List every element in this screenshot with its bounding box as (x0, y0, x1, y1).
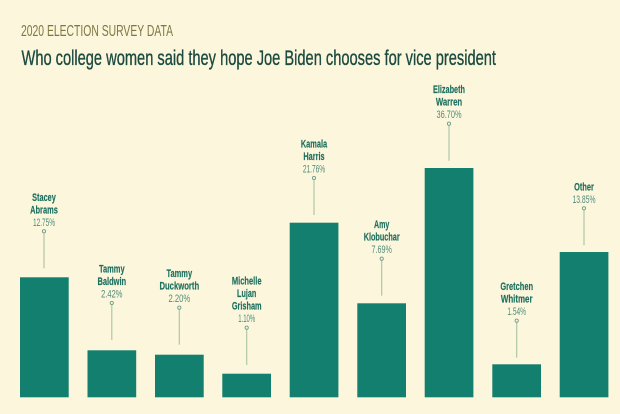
bar: Elizabeth Warren (425, 84, 473, 397)
bar: Tammy Duckworth: 2.20% (168, 293, 191, 305)
bar: Kamala Harris: Harris (303, 151, 325, 163)
bar: Amy Klobuchar: Amy (374, 219, 389, 231)
bar: Stacey Abrams: Abrams (30, 204, 58, 216)
bar: Tammy Baldwin: 2.42% (101, 288, 123, 300)
bar: Stacey Abrams (20, 192, 69, 397)
bar: Elizabeth Warren: Elizabeth (433, 84, 465, 96)
bar: Tammy Baldwin: Baldwin (97, 276, 126, 288)
bar: Kamala Harris (290, 139, 338, 397)
bar: Amy Klobuchar: 7.69% (372, 244, 392, 256)
kicker heading: 2020 ELECTION SURVEY DATA (21, 23, 173, 40)
bar: Gretchen Whitmer: Gretchen (500, 281, 533, 293)
bar: Kamala Harris: 21.76% (303, 164, 326, 176)
bar: Gretchen Whitmer: Whitmer (501, 294, 533, 306)
bar: Michelle Lujan Grisham: Grisham (232, 301, 262, 313)
bar: Michelle Lujan Grisham (222, 276, 271, 397)
bar: Tammy Baldwin (88, 264, 136, 397)
bar: Amy Klobuchar: Klobuchar (364, 232, 400, 244)
bar: Gretchen Whitmer: 1.54% (507, 306, 526, 318)
bar: Tammy Duckworth: Tammy (166, 268, 192, 280)
bar: Michelle Lujan Grisham: Lujan (237, 288, 256, 300)
bar: Gretchen Whitmer (492, 281, 541, 397)
bar chart (20, 84, 608, 397)
bar: Tammy Duckworth: Duckworth (159, 281, 199, 293)
bar: Amy Klobuchar (357, 219, 406, 397)
bar: Other: 13.85% (572, 194, 596, 206)
bar: Elizabeth Warren: Warren (436, 97, 462, 109)
bar: Elizabeth Warren: 36.70% (436, 109, 462, 121)
bar: Stacey Abrams: Stacey (32, 192, 56, 204)
bar: Tammy Duckworth (155, 268, 204, 397)
bar: Stacey Abrams: 12.75% (33, 217, 55, 229)
bar: Other: Other (574, 181, 594, 193)
bar: Other (560, 181, 608, 397)
bar: Michelle Lujan Grisham: Michelle (232, 276, 262, 288)
bar: Kamala Harris: Kamala (301, 139, 327, 151)
bar: Michelle Lujan Grisham: 1.10% (238, 313, 256, 325)
bar: Tammy Baldwin: Tammy (99, 264, 125, 276)
